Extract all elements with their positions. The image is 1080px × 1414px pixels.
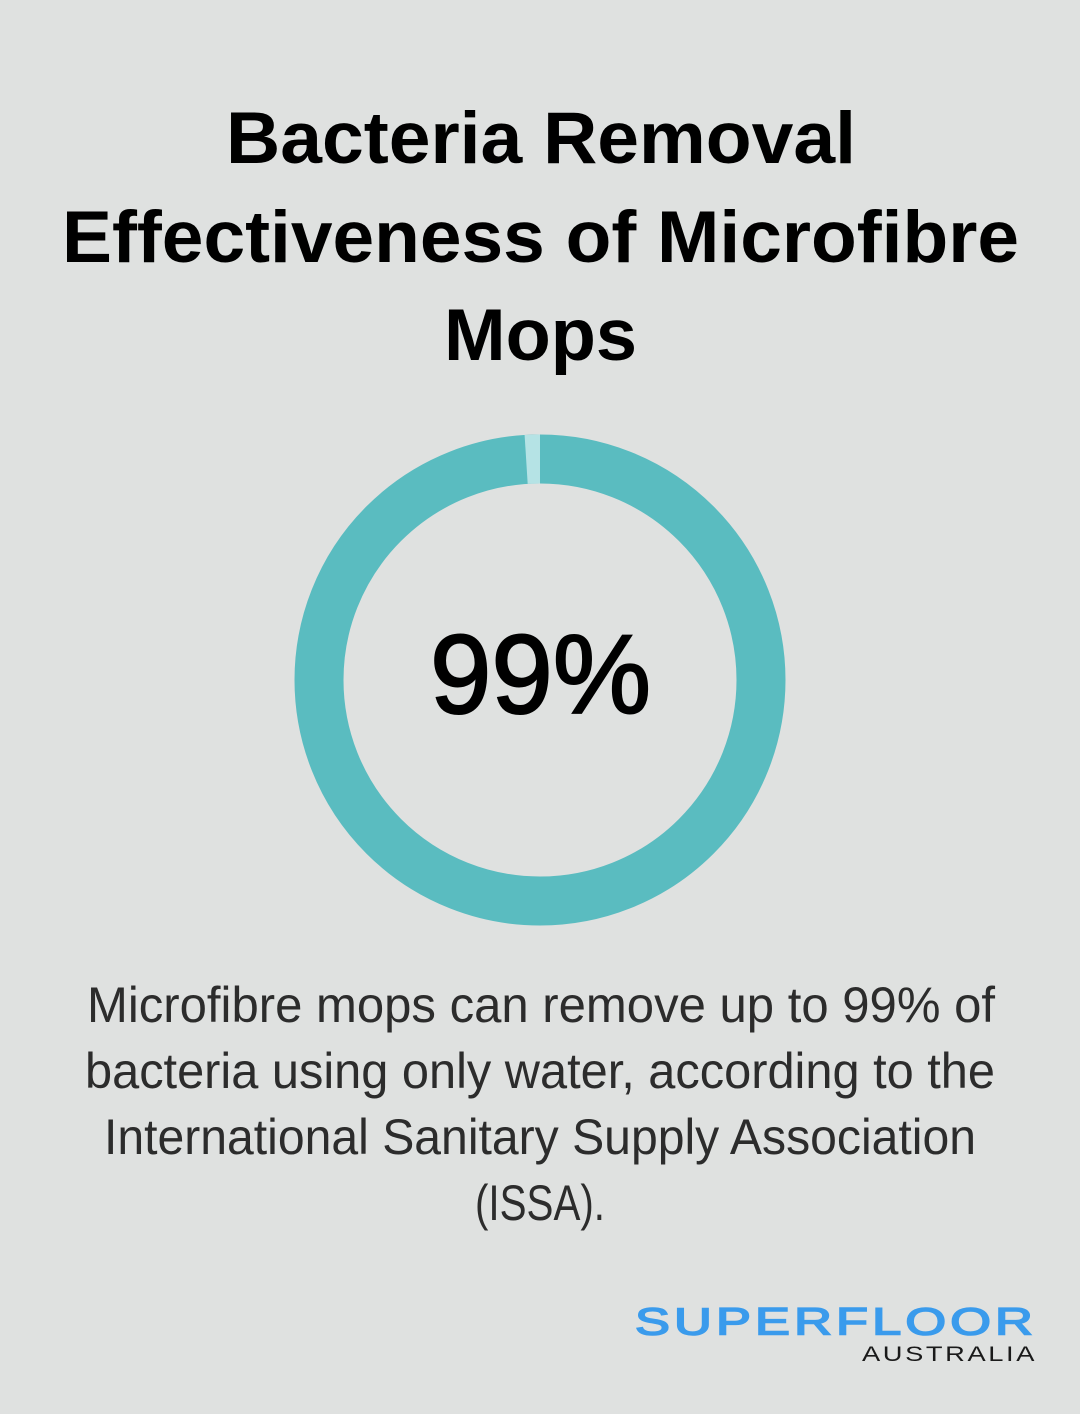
center value: 99% <box>430 612 651 737</box>
title: Mops <box>444 295 637 376</box>
title: Effectiveness of Microfibre <box>62 197 1019 278</box>
description text: bacteria using only water, according to the <box>85 1043 995 1099</box>
donut chart: 99% <box>319 434 761 901</box>
logo: Superfloor Australia: AUSTRALIA <box>862 1343 1037 1366</box>
title: Bacteria Removal <box>226 98 856 179</box>
remaining 1% segment <box>525 434 540 484</box>
description text: (ISSA). <box>475 1175 605 1231</box>
logo: Superfloor Australia: SUPERFLOOR <box>635 1302 1037 1344</box>
description text: International Sanitary Supply Association <box>104 1109 976 1165</box>
title <box>62 98 1019 376</box>
description text: Microfibre mops can remove up to 99% of <box>87 977 995 1033</box>
description text <box>85 977 995 1231</box>
logo: Superfloor Australia <box>635 1302 1037 1366</box>
